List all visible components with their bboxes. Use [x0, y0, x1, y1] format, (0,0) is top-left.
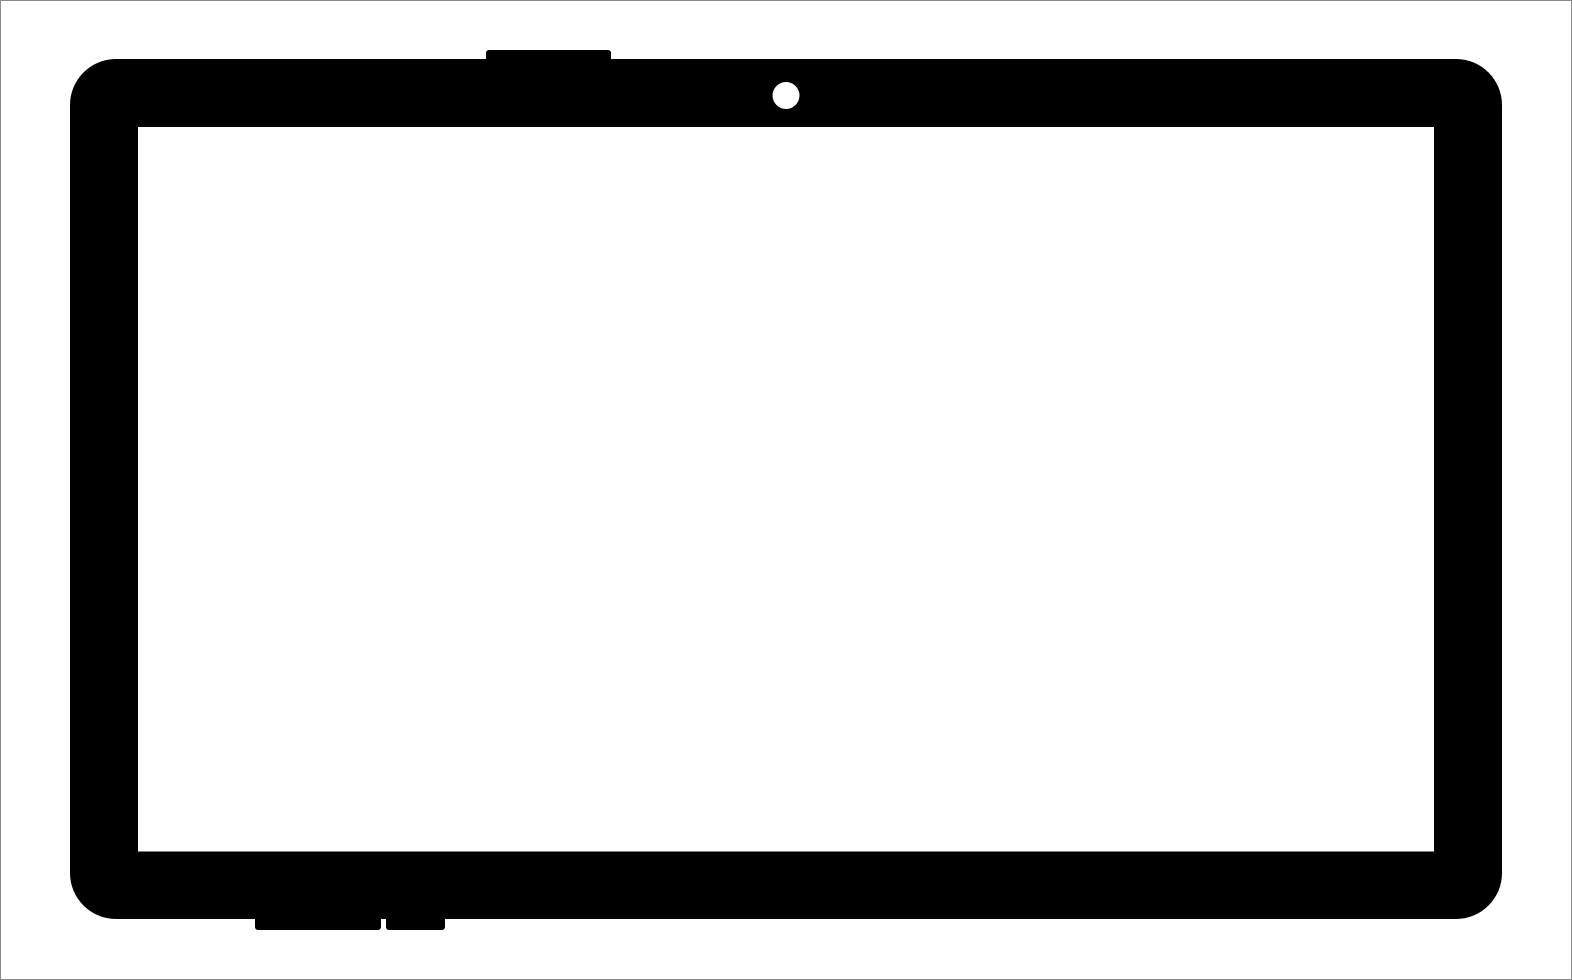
tablet body: [70, 59, 1502, 919]
screen: [138, 127, 1434, 852]
bottom left button: [255, 916, 381, 930]
bottom right button: [386, 916, 445, 930]
top power button: [486, 50, 611, 62]
front camera: [772, 82, 800, 109]
